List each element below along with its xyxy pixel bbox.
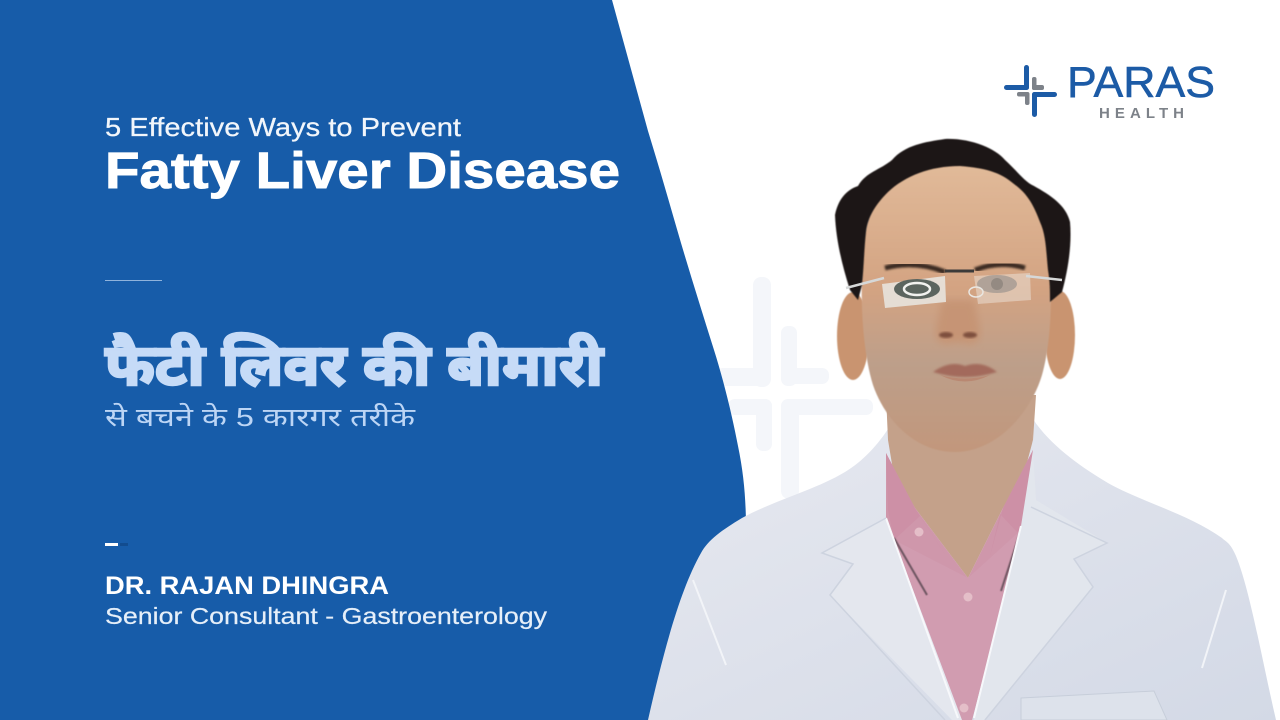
doctor role: Senior Consultant - Gastroenterology <box>105 603 548 629</box>
logo tagline: HEALTH <box>1099 105 1184 122</box>
dash <box>105 543 128 546</box>
title: Fatty Liver Disease <box>105 142 620 199</box>
logo <box>1004 58 1215 122</box>
doctor name: DR. RAJAN DHINGRA <box>105 572 389 600</box>
neck <box>886 395 1036 578</box>
hair <box>835 139 1071 302</box>
hindi title: फैटी लिवर की बीमारी <box>105 332 604 398</box>
divider <box>105 280 162 281</box>
ears <box>837 291 1075 380</box>
glasses <box>846 271 1062 308</box>
shirt <box>886 450 1033 720</box>
face <box>862 158 1051 452</box>
logo icon <box>1004 65 1057 117</box>
watermark cross <box>715 277 873 499</box>
logo wordmark: PARAS <box>1067 58 1215 107</box>
intro line: 5 Effective Ways to Prevent <box>105 112 462 142</box>
coat <box>648 419 1276 720</box>
facial features <box>885 264 1025 382</box>
hindi subtitle: से बचने के 5 कारगर तरीके <box>105 402 416 432</box>
doctor <box>648 139 1276 720</box>
lapels <box>693 419 1226 720</box>
blue panel <box>0 0 746 720</box>
